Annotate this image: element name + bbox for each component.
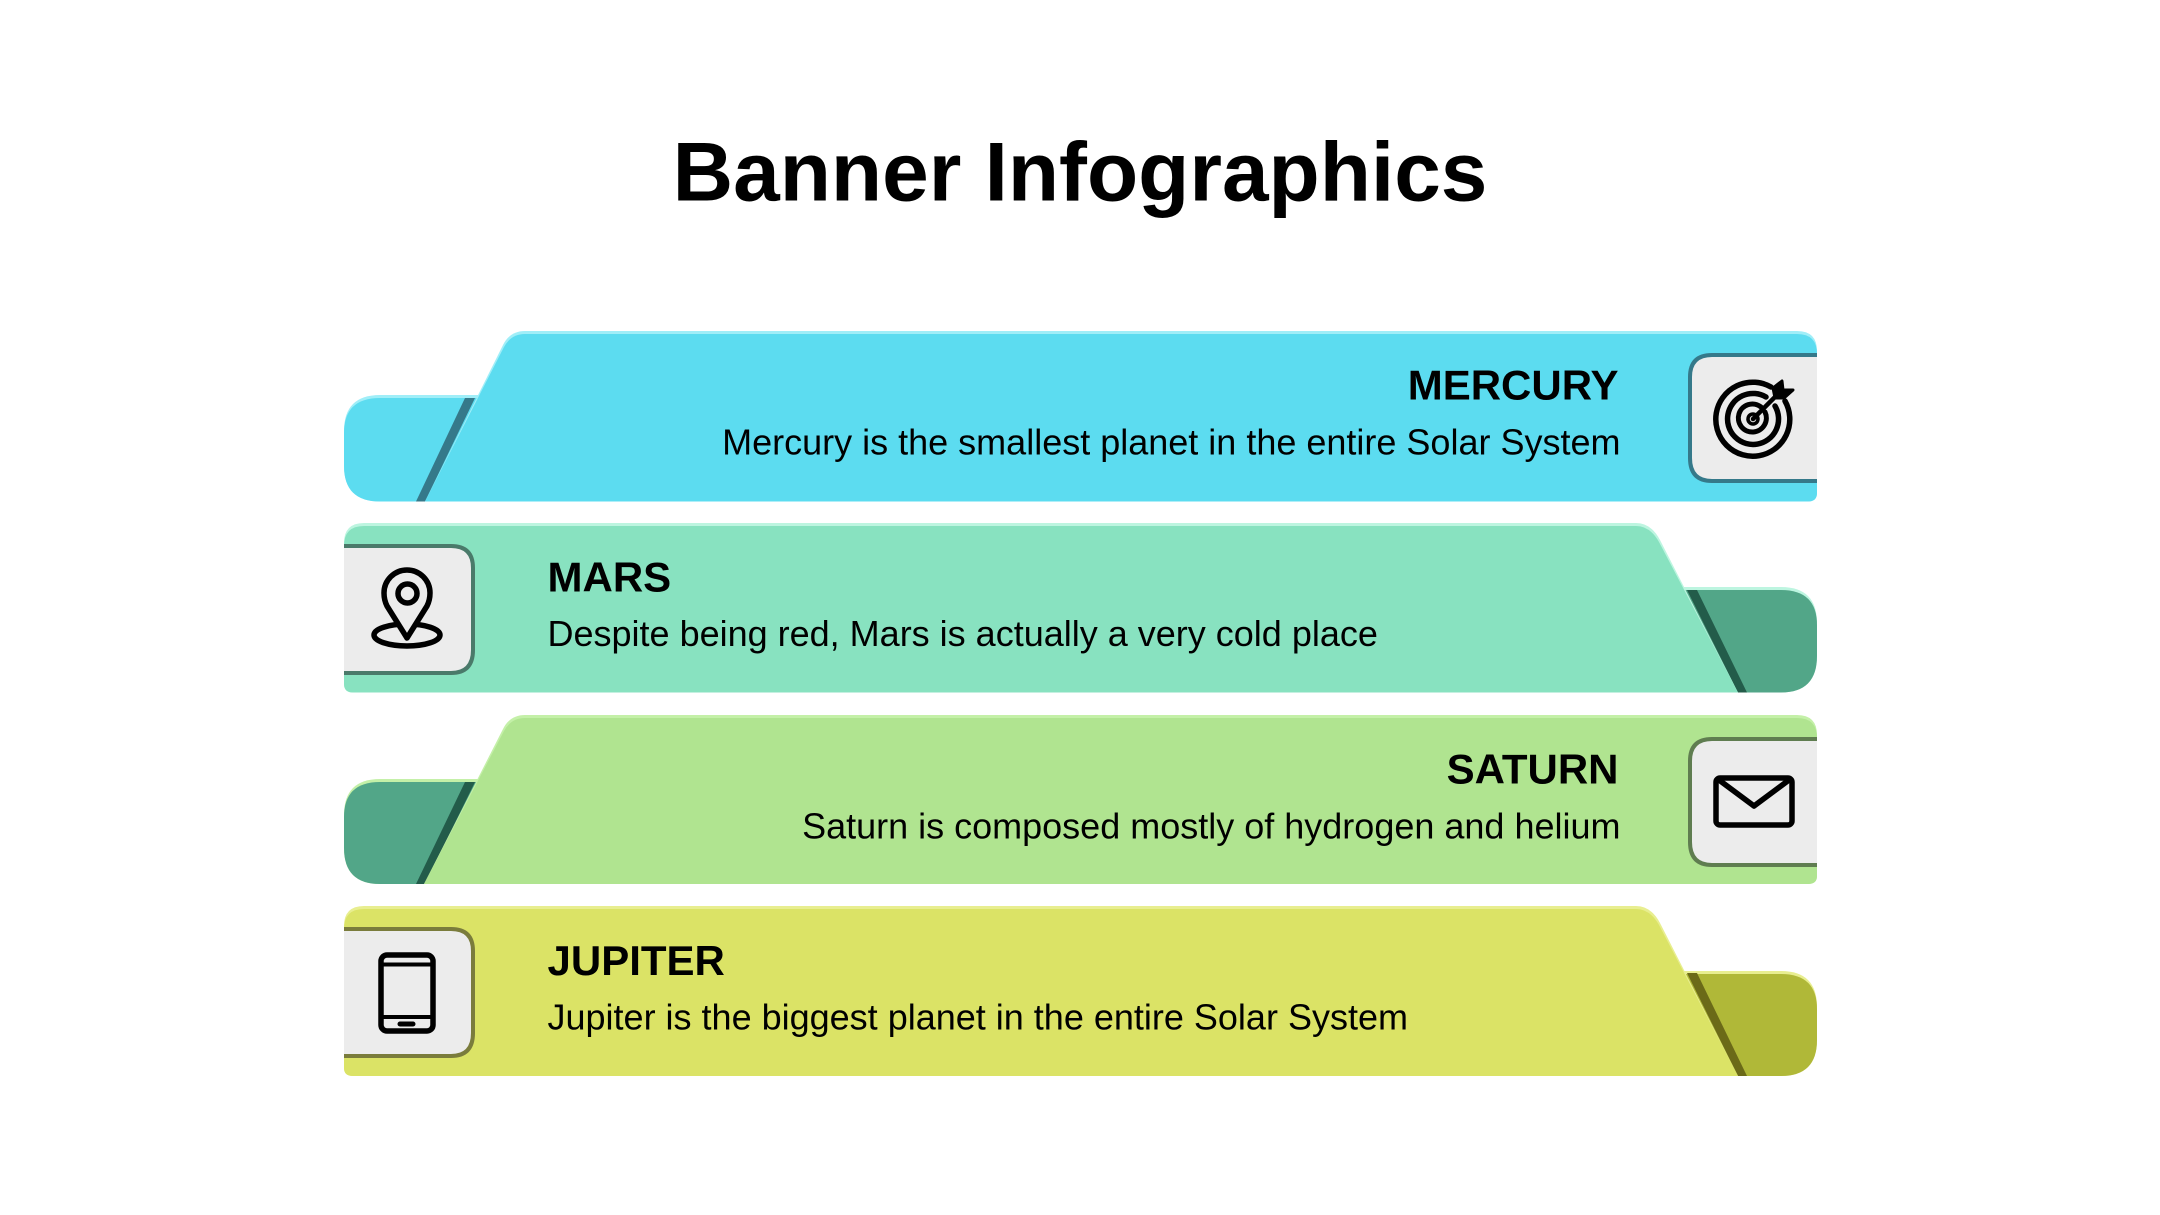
panel: Saturn banner xyxy=(344,715,1817,884)
icon: target xyxy=(1716,381,1793,456)
back tab: Jupiter xyxy=(1680,971,1817,1076)
icon box: Mars xyxy=(344,546,473,673)
icon box: Mercury xyxy=(1690,355,1817,481)
heading: Jupiter: JUPITER xyxy=(548,937,725,984)
icon box: Saturn xyxy=(1690,739,1817,865)
icon: location pin xyxy=(374,570,440,646)
heading: Mars: MARS xyxy=(548,554,671,600)
main banner: Mars xyxy=(344,523,1738,692)
description: Jupiter: Jupiter is the biggest planet in the entire Solar System xyxy=(548,996,1408,1038)
description: Mars: Despite being red, Mars is actually a very cold place xyxy=(548,613,1378,654)
fold stripe: Mercury xyxy=(416,398,475,502)
back tab: Mercury xyxy=(344,395,490,502)
icon box: Jupiter xyxy=(344,929,473,1056)
icon: envelope xyxy=(1716,778,1792,825)
panel: Mars banner xyxy=(344,523,1817,692)
icon: tablet xyxy=(381,955,433,1031)
panel: Mercury banner xyxy=(344,331,1817,502)
heading: Mercury: MERCURY xyxy=(1408,362,1618,408)
back tab: Mars xyxy=(1680,587,1817,692)
main banner: Mercury xyxy=(425,331,1817,502)
title: Banner Infographics xyxy=(673,124,1487,218)
main banner: Jupiter xyxy=(344,906,1738,1076)
description: Saturn: Saturn is composed mostly of hydrogen and helium xyxy=(802,806,1620,846)
main banner: Saturn xyxy=(424,715,1817,884)
fold stripe: Saturn xyxy=(416,782,475,884)
fold stripe: Jupiter xyxy=(1687,973,1747,1076)
panel: Jupiter banner xyxy=(344,906,1817,1076)
description: Mercury: Mercury is the smallest planet in the entire Solar System xyxy=(722,422,1620,462)
back tab: Saturn xyxy=(344,779,490,884)
heading: Saturn: SATURN xyxy=(1447,746,1618,792)
fold stripe: Mars xyxy=(1687,590,1747,692)
